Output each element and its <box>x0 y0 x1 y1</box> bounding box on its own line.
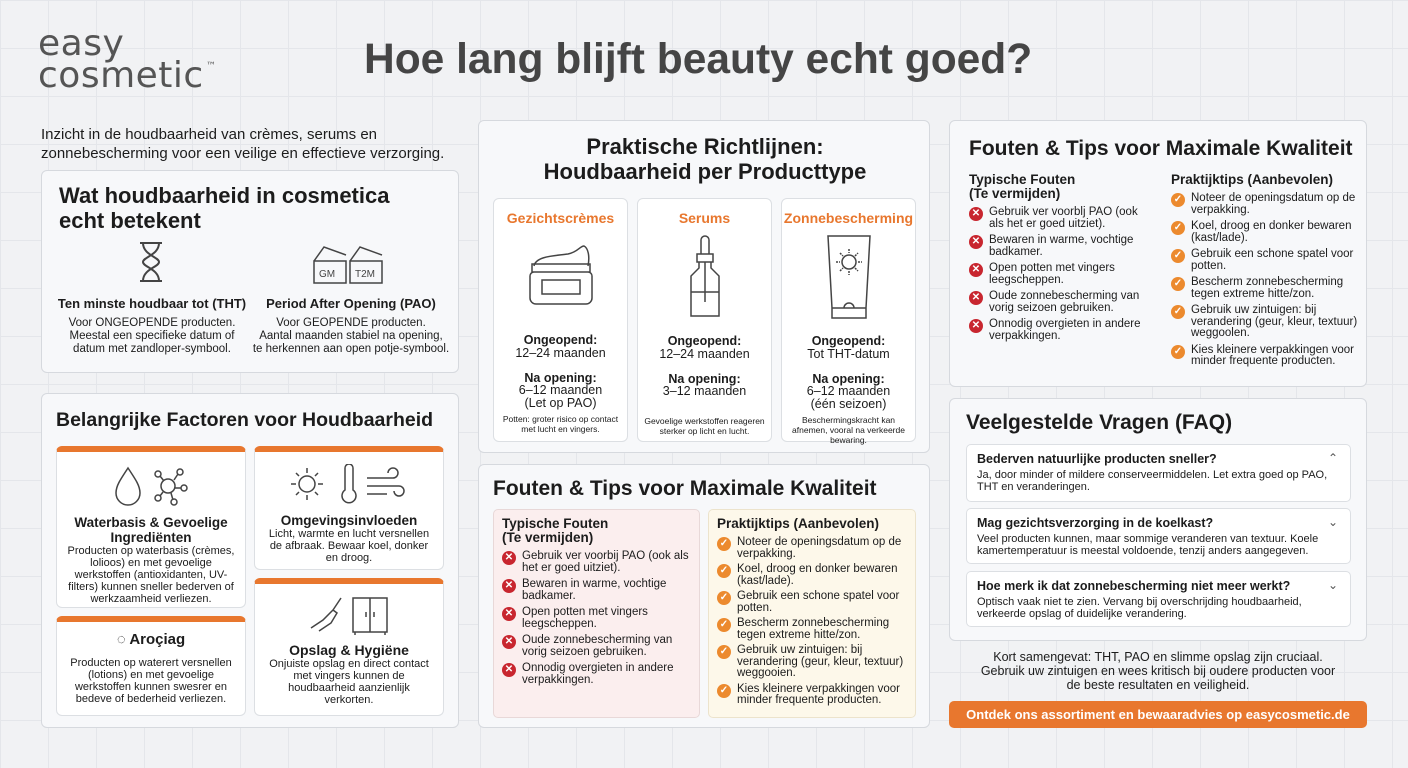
text: PAO: Aantal maanden stabiel na opening, <box>259 330 443 342</box>
list: typische fouten: Bewaren in warme, vochtige badkamer. <box>989 234 1133 258</box>
faq 1: Bederven natuurlijke producten sneller? <box>977 452 1217 466</box>
list: typische fouten: Onnodig overgieten in andere verpakkingen. <box>522 662 674 686</box>
list: typische fouten: Typische Fouten <box>969 172 1075 187</box>
list: praktijktips: ✓ <box>1174 306 1182 317</box>
card: gezichtscrèmes: 12–24 maanden <box>515 346 606 360</box>
panel: richtlijnen per producttype <box>478 120 930 453</box>
list: typische fouten: ✕ <box>505 608 513 619</box>
card: waterbasis: Waterbasis & Gevoelige <box>74 515 228 530</box>
heading: Belangrijke Factoren voor Houdbaarheid <box>56 409 433 431</box>
logo: ™ <box>206 61 216 72</box>
card: zonnebescherming <box>781 198 916 442</box>
list: praktijktips: Gebruik uw zintuigen: bij verandering (geur, kleur, textuur) weggooien. <box>737 644 903 679</box>
faq 3: ⌄ <box>1328 578 1338 592</box>
heading: Veelgestelde Vragen (FAQ) <box>966 411 1232 434</box>
card: zonnebescherming: (één seizoen) <box>811 396 886 410</box>
card: gezichtscrèmes: Ongeopend: <box>524 333 597 347</box>
card: serums: Ongeopend: <box>668 334 741 348</box>
button: call to action: Ontdek ons assortiment en bewaaradvies op easycosmetic.de <box>966 707 1350 722</box>
card: serums: Na opening: <box>668 372 741 386</box>
list: praktijktips <box>708 509 916 718</box>
list: typische fouten: Open potten met vingers leegscheppen. <box>989 262 1115 286</box>
list: praktijktips: Praktijktips (Aanbevolen) <box>1171 172 1333 187</box>
card: opslag <box>254 578 444 716</box>
heading <box>544 134 866 184</box>
card: gezichtscrèmes: Gezichtscrèmes <box>507 210 614 226</box>
list: typische fouten: Typische Fouten <box>502 516 608 531</box>
card: opslag: Onjuiste opslag en direct contact met vingers kunnen de houdbaarheid aanzienlijk verkorten. <box>269 658 429 706</box>
card: waterbasis: Ingrediënten <box>110 530 192 545</box>
card: serums: 12–24 maanden <box>659 346 750 360</box>
card: opslag: Opslag & Hygiëne <box>289 642 409 658</box>
list: typische fouten: ✕ <box>972 236 980 247</box>
faq 3: Optisch vaak niet te zien. Vervang bij overschrijding houdbaarheid, verkeerde opslag of duidelijke verandering. <box>977 596 1302 620</box>
list: typische fouten: Gebruik ver voorblj PAO (ook als het er goed uitziet). <box>989 206 1138 230</box>
list: praktijktips <box>1171 172 1357 367</box>
card: serums: 3–12 maanden <box>663 384 746 398</box>
list: praktijktips: ✓ <box>720 565 728 576</box>
text: PAO: Voor GEOPENDE producten. <box>276 317 426 329</box>
text: THT: Voor ONGEOPENDE producten. <box>69 317 235 329</box>
card: waterbasis <box>56 446 246 608</box>
summary text: Gebruik uw zintuigen en wees kritisch bij oudere producten voor <box>981 664 1335 678</box>
card: serums: Gevoelige werkstoffen reageren sterker op licht en lucht. <box>644 416 765 436</box>
list: typische fouten: ✕ <box>505 664 513 675</box>
list: praktijktips: Gebruik een schone spatel voor potten. <box>1191 248 1353 272</box>
list: praktijktips: Bescherm zonnebescherming tegen extreme hitte/zon. <box>737 617 889 640</box>
list: typische fouten: ✕ <box>972 264 980 275</box>
list: praktijktips: ✓ <box>720 684 728 696</box>
faq 3 <box>966 571 1351 627</box>
heading: Houdbaarheid per Producttype <box>544 159 866 184</box>
faq 1: ⌃ <box>1328 451 1338 465</box>
text: THT <box>58 296 246 355</box>
list: praktijktips: Koel, droog en donker bewaren (kast/lade). <box>1191 220 1351 244</box>
faq 3: Hoe merk ik dat zonnebescherming niet meer werkt? <box>977 579 1290 593</box>
card: omgevingsinvloeden <box>254 446 444 570</box>
list: praktijktips: ✓ <box>720 538 728 549</box>
card: zonnebescherming: 6–12 maanden <box>807 384 890 398</box>
card: zonnebescherming: Tot THT-datum <box>807 346 890 360</box>
list: praktijktips: ✓ <box>1174 278 1182 289</box>
list: praktijktips: ✓ <box>1174 222 1182 233</box>
heading: echt betekent <box>59 208 201 233</box>
logo: easy <box>38 23 124 64</box>
card: gezichtscrèmes: (Let op PAO) <box>524 396 597 410</box>
text: THT: datum met zandloper-symbool. <box>73 343 231 355</box>
panel: fouten & tips (rechts) <box>949 120 1367 387</box>
list: typische fouten <box>493 509 700 718</box>
list: praktijktips: Gebruik een schone spatel voor potten. <box>737 590 899 614</box>
intro text: Inzicht in de houdbaarheid van crèmes, serums en zonnebescherming voor een veilige en effectieve verzorging. <box>41 126 444 162</box>
list: praktijktips: Kies kleinere verpakkingen voor minder frequente producten. <box>1191 344 1354 367</box>
card: gezichtscrèmes <box>493 198 628 442</box>
text: PAO: te herkennen aan open potje-symbool. <box>253 343 449 355</box>
text: THT: Meestal een specifieke datum of <box>70 330 234 342</box>
list: praktijktips: Kies kleinere verpakkingen voor minder frequente producten. <box>737 682 900 706</box>
card: aroçiag <box>56 616 246 716</box>
list: typische fouten: ✕ <box>505 552 513 563</box>
list: praktijktips: ✓ <box>720 619 728 630</box>
heading <box>59 183 390 233</box>
list: typische fouten: Oude zonnebescherming van vorig seizoen gebruiken. <box>989 290 1139 314</box>
list: typische fouten: Bewaren in warme, vochtige badkamer. <box>522 578 666 602</box>
logo: cosmetic <box>38 55 204 96</box>
text: THT: Ten minste houdbaar tot (THT) <box>58 296 246 311</box>
heading: Fouten & Tips voor Maximale Kwaliteit <box>493 477 877 500</box>
heading: Praktische Richtlijnen: <box>586 134 824 159</box>
summary text: Kort samengevat: THT, PAO en slimme opslag zijn cruciaal. <box>993 650 1323 664</box>
list: typische fouten: (Te vermijden) <box>969 186 1060 201</box>
card: gezichtscrèmes: Na opening: <box>524 370 597 384</box>
panel: FAQ <box>949 398 1367 641</box>
card: waterbasis: Producten op waterbasis (crèmes, lolioos) en met gevoelige werkstoffen (antioxidanten, UV-filters) kunnen sneller bederven of werkzaamheid verliezen. <box>68 545 234 605</box>
faq 1: Ja, door minder of mildere conserveermiddelen. Let extra goed op PAO, THT en veranderingen. <box>977 469 1327 493</box>
icon: hourglass <box>140 242 162 282</box>
list: praktijktips: ✓ <box>720 592 728 603</box>
list: praktijktips: ✓ <box>720 646 728 657</box>
card: zonnebescherming: Beschermingskracht kan afnemen, vooral na verkeerde bewaring. <box>792 415 905 445</box>
card: zonnebescherming: Na opening: <box>812 372 885 386</box>
panel: factoren <box>41 393 459 728</box>
card: zonnebescherming: Zonnebescherming <box>784 210 913 226</box>
text: PAO <box>253 296 449 355</box>
panel: fouten & tips (midden) <box>478 464 930 728</box>
panel: houdbaarheid betekenis <box>41 170 459 373</box>
list: typische fouten: Open potten met vingers leegscheppen. <box>522 606 648 630</box>
list: typische fouten: ✕ <box>505 636 513 647</box>
list: praktijktips: Koel, droog en donker bewaren (kast/lade). <box>737 563 897 586</box>
heading: Wat houdbaarheid in cosmetica <box>59 183 389 208</box>
card: aroçiag: Producten op waterert versnellen (lotions) en met gevoelige werkstoffen kunnen swesrer en bedeve of bederheid verliezen. <box>70 657 232 705</box>
list: praktijktips: Gebruik uw zintuigen: bij verandering (geur, kleur, textuur) weggoolen. <box>1191 304 1357 339</box>
list: praktijktips: ✓ <box>1174 346 1182 356</box>
card: serums <box>637 198 772 442</box>
list: praktijktips: ✓ <box>1174 194 1182 205</box>
icon: PAO jars <box>313 246 383 284</box>
list: typische fouten <box>969 172 1141 342</box>
summary text: de beste resultaten en veiligheid. <box>1067 678 1249 692</box>
list: typische fouten: Gebruik ver voorbij PAO (ook als het er goed uitziet). <box>522 550 689 574</box>
icon: PAO jars: GM <box>319 269 335 280</box>
list: praktijktips: Noteer de openingsdatum op de verpakking. <box>737 536 901 560</box>
list: praktijktips: Noteer de openingsdatum op de verpakking. <box>1191 192 1355 216</box>
list: praktijktips: Bescherm zonnebescherming tegen extreme hitte/zon. <box>1191 276 1343 300</box>
faq 2 <box>966 508 1351 564</box>
card: gezichtscrèmes: 6–12 maanden <box>519 383 602 397</box>
card: serums: Serums <box>679 210 730 226</box>
list: praktijktips: ✓ <box>1174 250 1182 261</box>
card: omgevingsinvloeden: Licht, warmte en lucht versnellen de afbraak. Bewaar koel, donker en droog. <box>269 528 429 564</box>
card: aroçiag: ◌ Aroçiag <box>117 631 185 648</box>
list: typische fouten: ✕ <box>972 320 980 331</box>
card: zonnebescherming: Ongeopend: <box>812 334 885 348</box>
title: Hoe lang blijft beauty echt goed? <box>364 36 1032 83</box>
card: gezichtscrèmes: Potten: groter risico op contact met lucht en vingers. <box>503 414 618 434</box>
list: typische fouten: ✕ <box>505 580 513 591</box>
list: typische fouten: ✕ <box>972 208 980 219</box>
list: typische fouten: ✕ <box>972 292 980 303</box>
list: praktijktips: Praktijktips (Aanbevolen) <box>717 516 879 531</box>
faq 2: ⌄ <box>1328 515 1338 529</box>
logo <box>38 23 216 96</box>
button: call to action <box>949 701 1367 728</box>
heading: Fouten & Tips voor Maximale Kwaliteit <box>969 137 1353 160</box>
card: omgevingsinvloeden: Omgevingsinvloeden <box>281 513 417 528</box>
list: typische fouten: (Te vermijden) <box>502 530 593 545</box>
faq 1 <box>966 444 1351 502</box>
list: typische fouten: Onnodig overgieten in andere verpakkingen. <box>989 318 1141 342</box>
icon: PAO jars: T2M <box>355 269 375 280</box>
summary text <box>981 650 1335 692</box>
text: PAO: Period After Opening (PAO) <box>266 296 436 311</box>
faq 2: Mag gezichtsverzorging in de koelkast? <box>977 516 1213 530</box>
list: typische fouten: Oude zonnebescherming van vorig seizoen gebruiken. <box>522 634 672 658</box>
faq 2: Veel producten kunnen, maar sommige veranderen van textuur. Koele kamertemperatuur is meestal voldoende, tenzij anders aangegeven. <box>977 533 1318 557</box>
